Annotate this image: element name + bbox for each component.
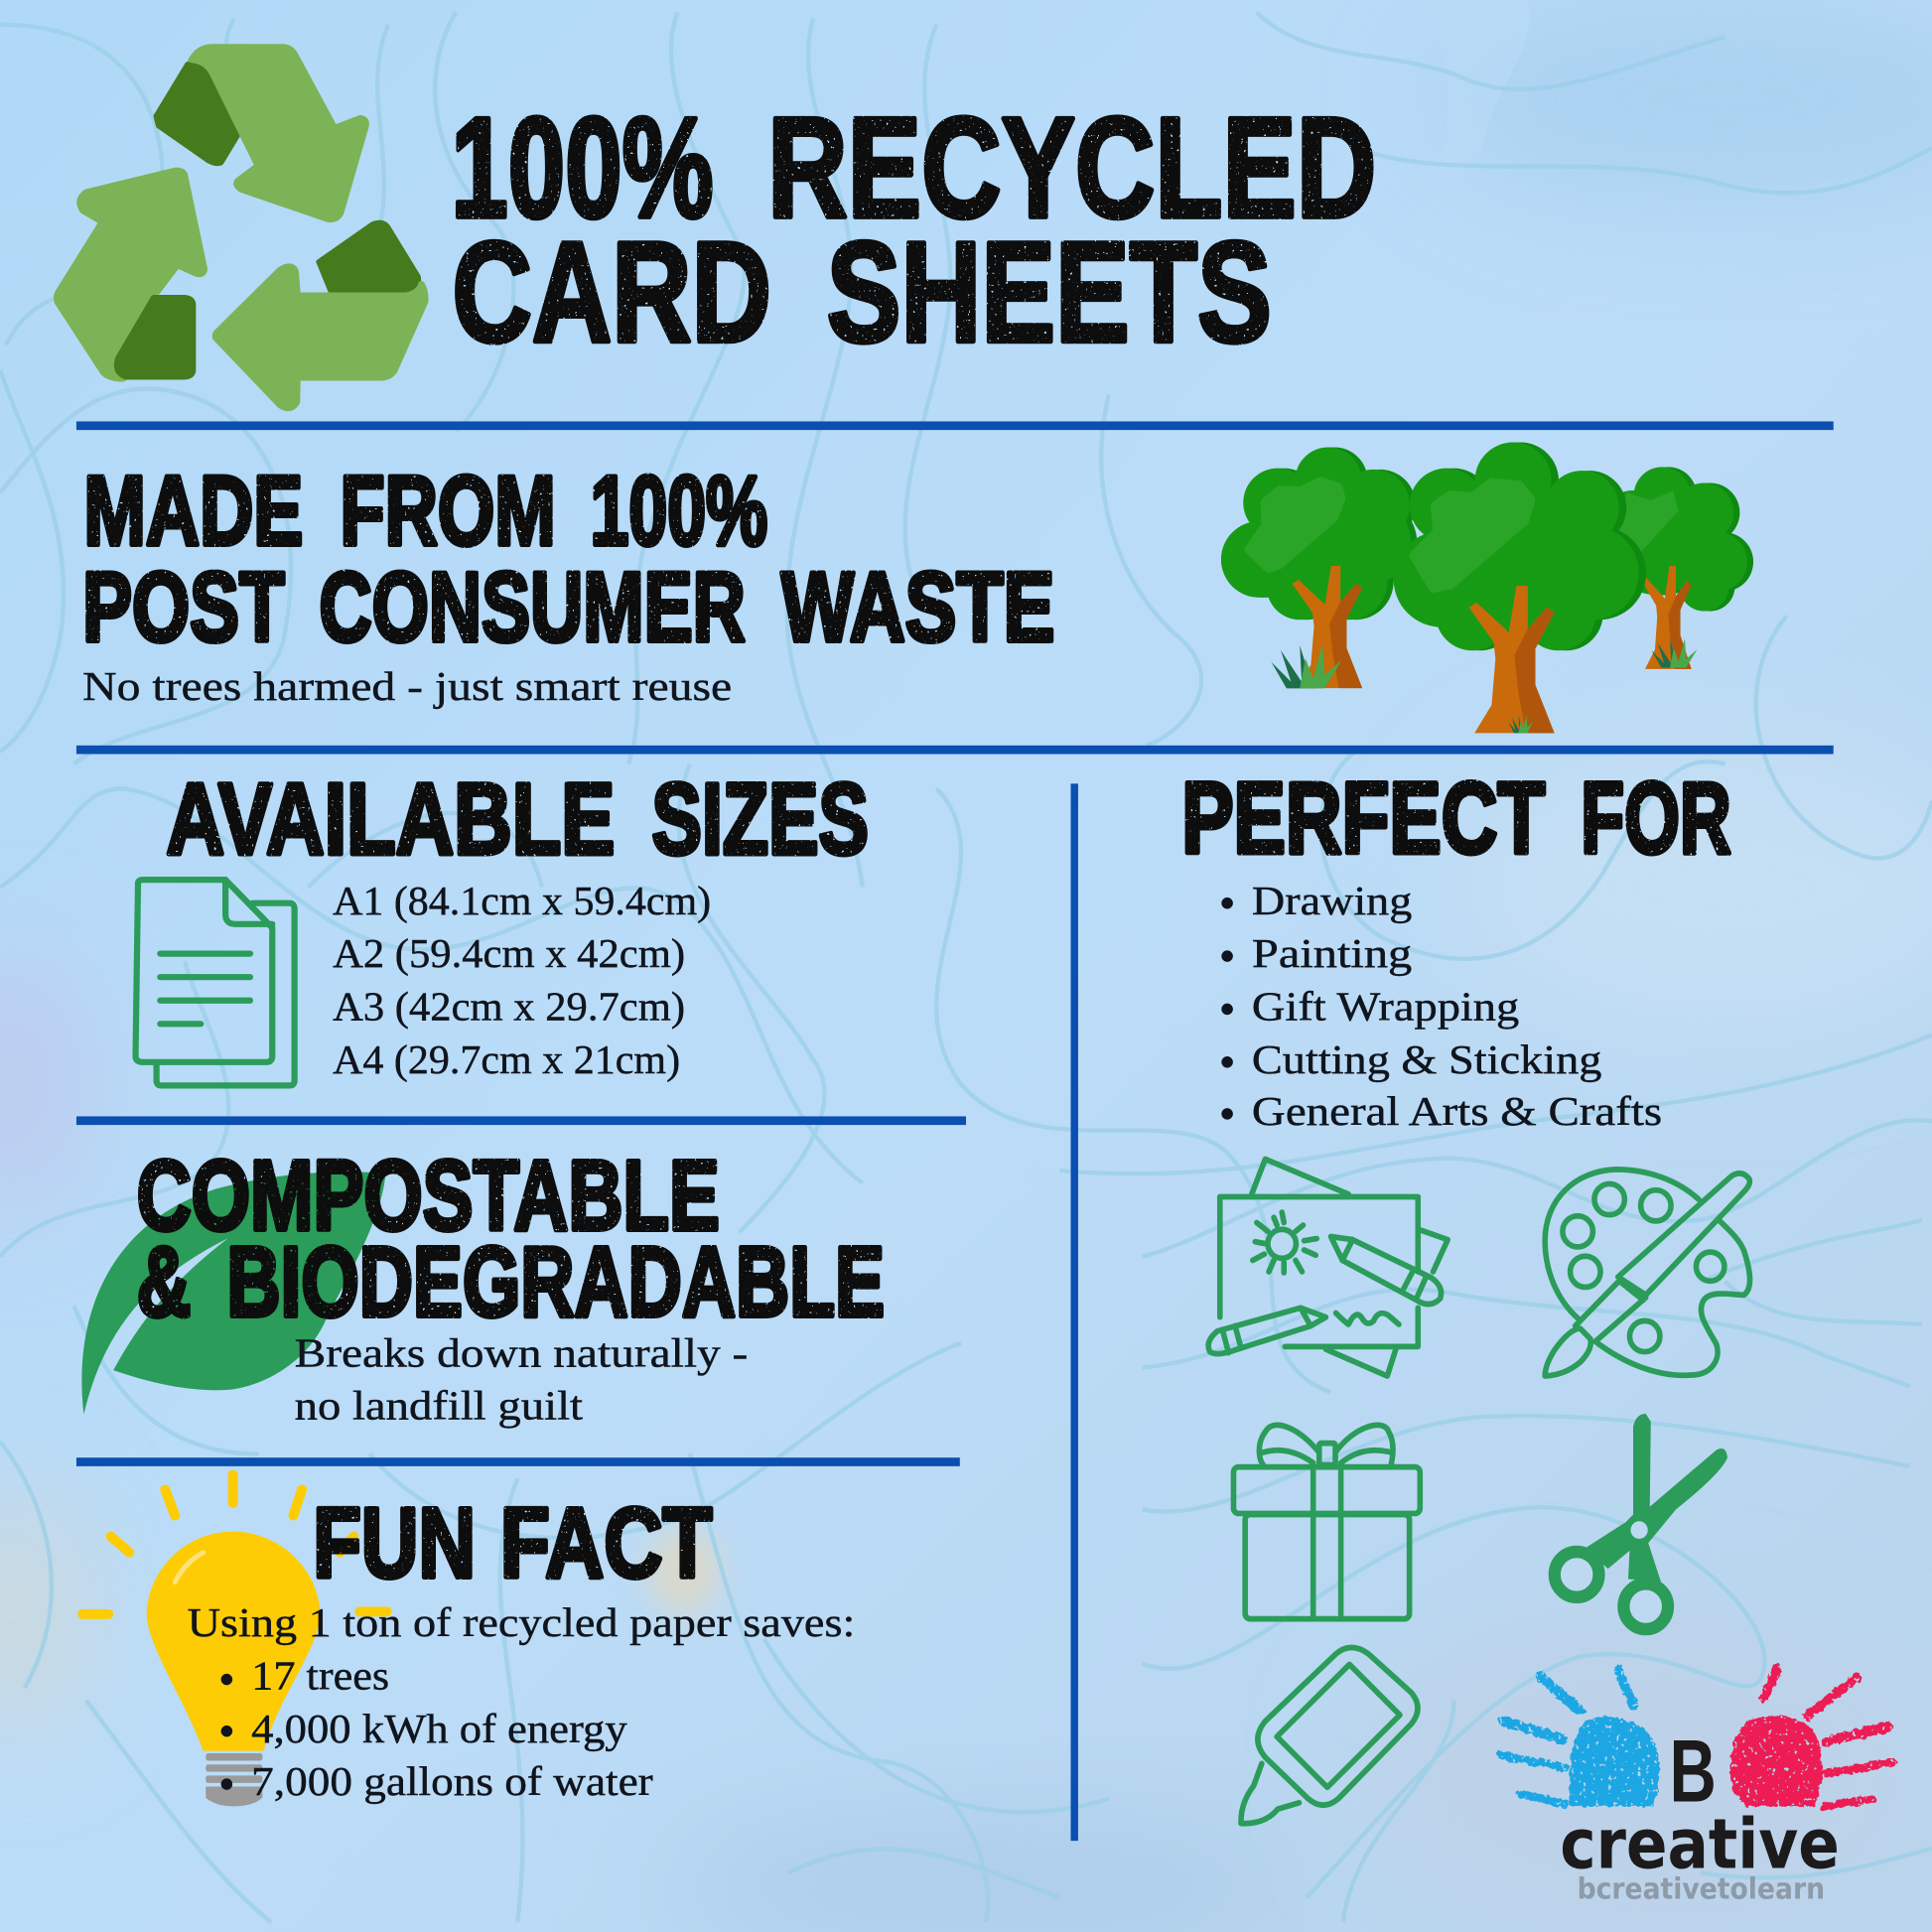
uses list: General Arts & Crafts — [1252, 1089, 1662, 1134]
title: RECYCLED — [767, 87, 1376, 247]
sizes list: A4 (29.7cm x 21cm) — [333, 1037, 680, 1082]
fun fact text: 7,000 gallons of water — [251, 1759, 653, 1804]
heading: fun fact: FACT — [500, 1488, 712, 1599]
dark fold: top — [157, 63, 239, 164]
heading: perfect for: PERFECT — [1181, 761, 1545, 875]
logo text: bcreativetolearn: bcreativetolearn — [1578, 1871, 1825, 1906]
icon: three trees — [1221, 443, 1753, 733]
dark fold: right — [319, 222, 418, 295]
icon: palette and brush — [1545, 1170, 1750, 1376]
arrow: left — [57, 170, 205, 379]
arrow: top — [191, 47, 366, 220]
title — [451, 87, 1376, 372]
divider — [76, 1457, 960, 1466]
icons: craft activities — [1208, 1159, 1892, 1824]
uses list: Gift Wrapping — [1252, 985, 1519, 1030]
icon: gift box — [1233, 1425, 1420, 1619]
tagline: No trees harmed - just smart reuse — [82, 664, 732, 709]
divider — [76, 746, 1834, 755]
heading: compostable: COMPOSTABLE — [137, 1141, 720, 1252]
tree: right — [1603, 467, 1753, 669]
heading: post consumer waste: WASTE — [781, 552, 1054, 662]
fun fact text: 4,000 kWh of energy — [251, 1707, 627, 1751]
compostable description: no landfill guilt — [295, 1384, 584, 1429]
heading: perfect for: FOR — [1581, 761, 1731, 875]
uses list — [1222, 879, 1662, 1134]
vertical divider — [1070, 783, 1078, 1841]
logo: handprints — [1501, 1670, 1892, 1807]
panel: fun fact — [82, 1475, 855, 1806]
heading: compostable: BIODEGRADABLE — [226, 1226, 885, 1337]
icon: scissors — [1555, 1414, 1727, 1629]
heading: available sizes: AVAILABLE — [167, 762, 615, 876]
sizes list: A1 (84.1cm x 59.4cm) — [333, 879, 711, 923]
arrow: right — [215, 266, 425, 409]
icon: lightbulb — [82, 1475, 387, 1806]
panel: compostable — [81, 1141, 885, 1429]
heading: compostable: & — [137, 1226, 191, 1337]
icon: recycling symbol — [57, 47, 425, 409]
tree: left — [1221, 448, 1417, 688]
uses list: Drawing — [1252, 879, 1412, 923]
fun fact text: Using 1 ton of recycled paper saves: — [188, 1600, 855, 1645]
panel: available sizes — [136, 762, 869, 1085]
heading: post consumer waste: FROM — [341, 457, 556, 567]
heading: post consumer waste: 100% — [590, 457, 767, 567]
dark fold: bottom left — [117, 297, 193, 377]
heading: post consumer waste: CONSUMER — [319, 552, 746, 662]
logo text: creative: creative — [1560, 1804, 1840, 1884]
compostable description — [295, 1330, 748, 1429]
title: CARD — [452, 212, 771, 372]
heading: available sizes: SIZES — [652, 762, 869, 876]
heading: post consumer waste: MADE — [83, 457, 303, 567]
icon: glue bottle — [1241, 1647, 1418, 1824]
heading: post consumer waste — [82, 457, 1054, 662]
divider — [76, 1116, 966, 1125]
tree: middle — [1394, 443, 1646, 733]
compostable description: Breaks down naturally - — [295, 1330, 748, 1375]
logo text: B: B — [1670, 1721, 1717, 1820]
fun fact text — [188, 1600, 855, 1804]
icon: document pages — [136, 880, 295, 1085]
heading: fun fact: FUN — [313, 1488, 476, 1599]
divider — [76, 421, 1834, 430]
sizes list: A2 (59.4cm x 42cm) — [333, 931, 685, 976]
heading: post consumer waste: POST — [82, 552, 285, 662]
title: SHEETS — [827, 212, 1272, 372]
icon: leaf — [81, 1172, 385, 1415]
sizes list: A3 (42cm x 29.7cm) — [333, 985, 685, 1030]
uses list: Cutting & Sticking — [1252, 1037, 1601, 1082]
icon: drawing cards and pencils — [1208, 1159, 1448, 1376]
title: 100% — [451, 87, 714, 247]
heading: compostable — [137, 1141, 885, 1337]
heading: fun fact — [313, 1488, 712, 1599]
sizes list — [333, 879, 711, 1082]
fun fact text: 17 trees — [251, 1654, 389, 1699]
uses list: Painting — [1252, 931, 1412, 976]
panel: perfect for — [1181, 761, 1892, 1906]
